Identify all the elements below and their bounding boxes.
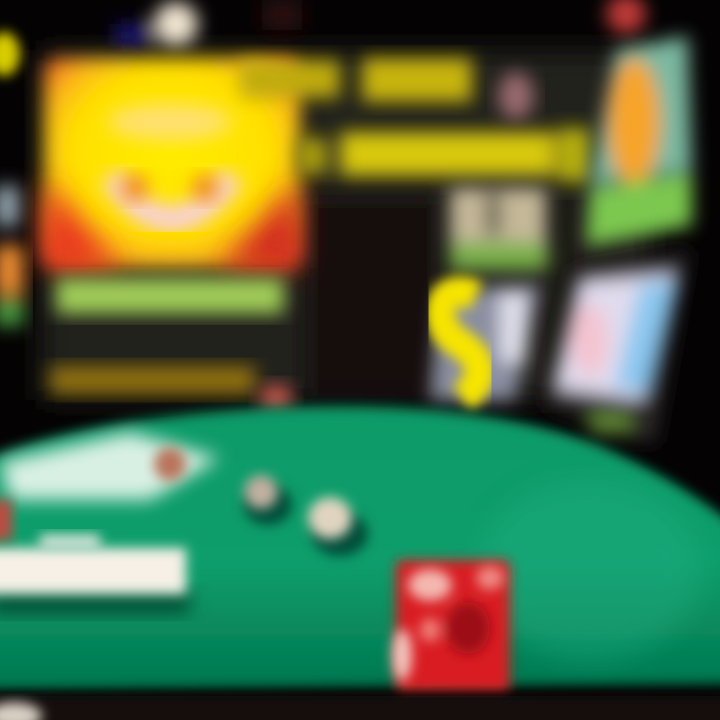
sign inner pale glow (108, 104, 232, 140)
bar shadow (0, 590, 190, 614)
bar (0, 548, 186, 594)
table card red marker (154, 447, 186, 481)
die (308, 497, 352, 539)
table lighter pattern (480, 480, 700, 660)
white card bar (0, 534, 190, 614)
yellow heading second line (296, 128, 590, 182)
table cards left (0, 432, 220, 500)
poster blue green frame (590, 36, 692, 184)
left edge yellow light (0, 32, 20, 76)
lower poster frame (545, 250, 690, 445)
bar top smudge (40, 534, 100, 550)
block highlights (392, 566, 504, 681)
poster orange centre (608, 58, 660, 186)
lower poster blue patch (615, 280, 674, 392)
green banner (56, 278, 284, 314)
die shadow (244, 485, 292, 525)
dice small (244, 475, 292, 525)
back wall (40, 50, 650, 400)
red dice block (392, 560, 510, 692)
panel: sun sign (44, 58, 300, 268)
lower poster pink patch (572, 304, 608, 376)
upper figure (498, 72, 534, 120)
block body (396, 560, 510, 692)
middle small poster (450, 188, 548, 270)
middle lower poster (430, 285, 540, 400)
right tall poster (586, 36, 692, 246)
top ceiling lights (115, 0, 646, 46)
red left edge chip (0, 500, 12, 540)
dice large (308, 497, 368, 556)
green table (0, 406, 720, 690)
die (244, 475, 278, 509)
lower poster green foot (590, 412, 630, 434)
sign sun background (44, 58, 300, 268)
red chip on table edge (259, 384, 293, 412)
bottom left white spot (0, 702, 42, 720)
table bottom edge (0, 696, 720, 720)
poster green base (586, 172, 692, 246)
sign orange corners (44, 180, 300, 268)
yellow S symbol (440, 292, 480, 398)
die shadow (312, 512, 368, 556)
right lower poster (545, 250, 690, 445)
yellow heading top (240, 58, 472, 102)
sign pale arc (112, 176, 232, 219)
left edge machine (0, 186, 24, 326)
lower poster screen (556, 274, 674, 400)
sign red accents (122, 175, 218, 201)
gold caption bar (50, 366, 255, 394)
